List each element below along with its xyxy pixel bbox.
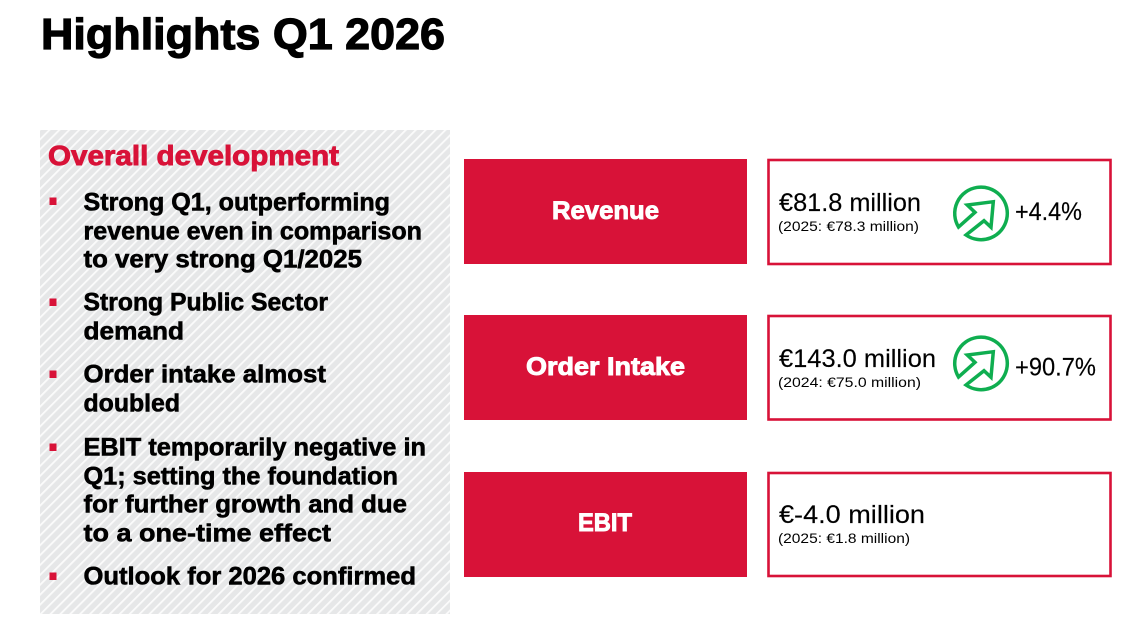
order intake prior year: (2024: €75.0 million) <box>778 374 921 390</box>
label box: revenue <box>464 159 747 264</box>
bullet 1: revenue even in comparison <box>84 218 422 246</box>
panel: overall development <box>40 130 450 614</box>
bullet 4: Q1; setting the foundation <box>84 462 398 490</box>
panel heading: Overall development <box>48 140 339 171</box>
bullet 2 <box>50 288 328 346</box>
label box: EBIT: EBIT <box>578 509 632 537</box>
bullet 4 <box>50 434 426 548</box>
EBIT value: €-4.0 million <box>779 501 925 529</box>
bullet 2: demand <box>84 318 184 346</box>
bullet 3 <box>50 360 327 418</box>
bullet 1: to very strong Q1/2025 <box>84 246 362 274</box>
title: Highlights Q1 2026 <box>41 10 445 59</box>
icon: green up arrow <box>955 337 1007 390</box>
bullet 4: for further growth and due <box>84 490 407 518</box>
value box: EBIT <box>768 473 1110 576</box>
revenue change: +4.4% <box>1015 198 1082 226</box>
bullet 3: Order intake almost <box>84 360 327 388</box>
bullet 3: doubled <box>84 390 180 418</box>
bullet 4: EBIT temporarily negative in <box>84 434 426 462</box>
revenue value: €81.8 million <box>779 189 921 217</box>
EBIT prior year: (2025: €1.8 million) <box>778 530 910 546</box>
order intake value: €143.0 million <box>779 345 936 373</box>
value box: order intake <box>768 316 1110 420</box>
bullet 1 <box>50 188 422 274</box>
icon: green up arrow <box>955 187 1007 240</box>
bullet 4: to a one-time effect <box>84 520 332 548</box>
bullet 2: Strong Public Sector <box>84 288 328 316</box>
order intake change: +90.7% <box>1015 354 1096 382</box>
bullet 1: Strong Q1, outperforming <box>84 188 390 216</box>
label box: EBIT <box>464 472 747 577</box>
bullet 5: Outlook for 2026 confirmed <box>84 562 416 590</box>
label box: order intake: Order Intake <box>526 353 685 381</box>
revenue prior year: (2025: €78.3 million) <box>778 218 919 234</box>
value box: revenue <box>768 160 1110 264</box>
label box: revenue: Revenue <box>552 197 659 225</box>
label box: order intake <box>464 315 747 420</box>
